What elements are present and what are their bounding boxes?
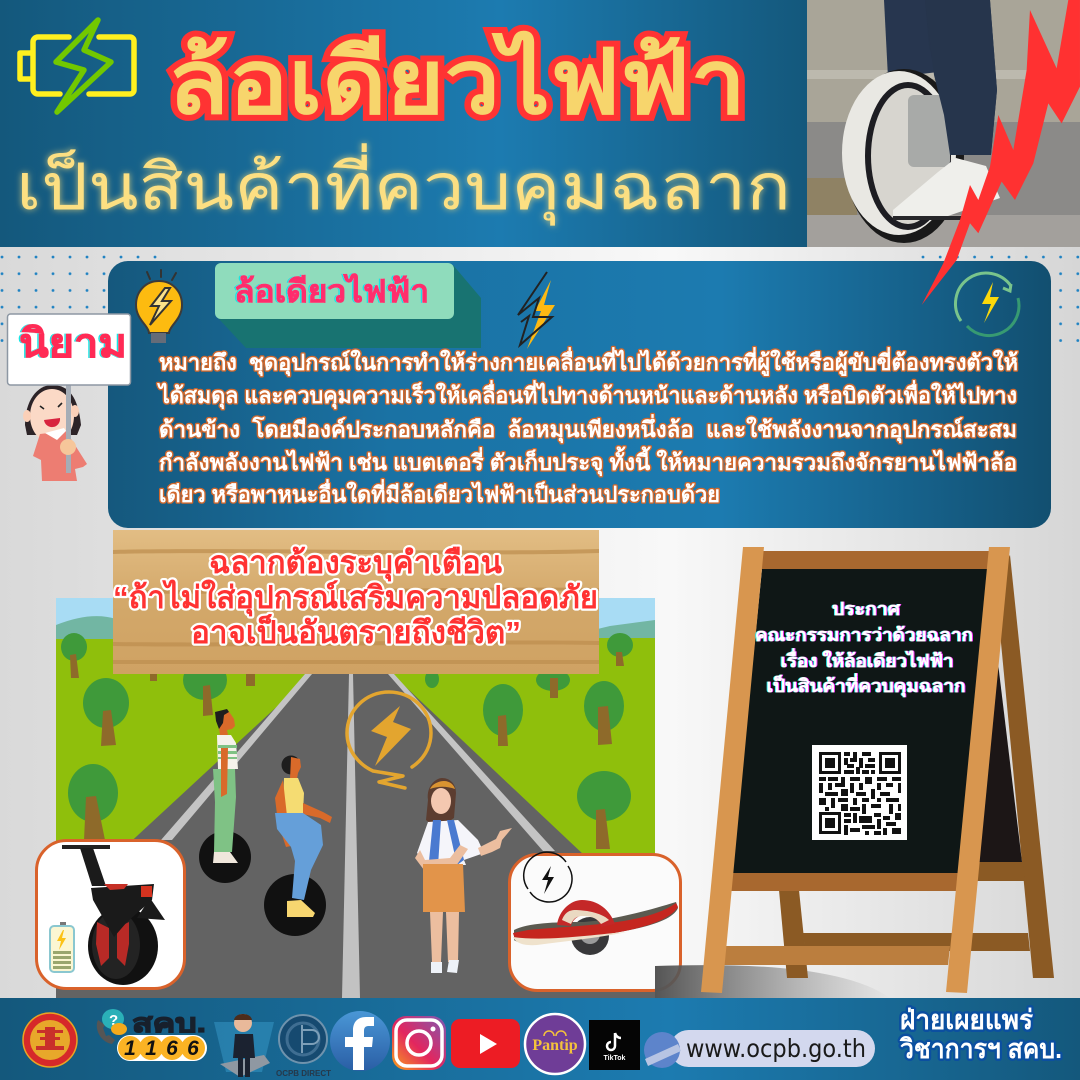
wood sign: warning: อาจเป็นอันตรายถึงชีวิต” xyxy=(191,613,521,650)
title: ล้อเดียวไฟฟ้า xyxy=(168,31,746,133)
logo: hotline 1166: 1 xyxy=(145,1037,157,1060)
definition text: กำลังพลังงานไฟฟ้า เช่น แบตเตอรี่ ตัวเก็บประจุ ทั้งนี้ ให้หมายความรวมถึงจักรยานไฟฟ้าล้อ xyxy=(159,446,1017,477)
logo: hotline 1166: ? xyxy=(109,1012,118,1029)
logo: TikTok xyxy=(589,1020,640,1070)
board text: คณะกรรมการว่าด้วยฉลาก xyxy=(755,625,973,645)
icon: globe xyxy=(644,1032,681,1068)
definition text: เดียว หรือพาหนะอื่นใดที่มีล้อเดียวไฟฟ้าเป็นส่วนประกอบด้วย xyxy=(159,478,720,507)
board text xyxy=(755,599,973,698)
definition text: ด้านข้าง โดยมีองค์ประกอบหลักคือ ล้อหมุนเพียงหนึ่งล้อ และใช้พลังงานจากอุปกรณ์สะสม xyxy=(159,413,1017,444)
logo: hotline 1166: สคบ. xyxy=(132,1008,206,1038)
website pill xyxy=(644,1030,875,1068)
icon: charging cycle xyxy=(956,273,1019,336)
sign: definition xyxy=(8,314,130,385)
label: heading xyxy=(215,263,454,319)
illustration: rider one xyxy=(199,709,251,883)
icon: light bulb xyxy=(136,270,182,343)
wood sign: warning: ฉลากต้องระบุคำเตือน xyxy=(209,545,502,582)
footer bar xyxy=(0,998,1080,1080)
department credit: ฝ่ายเผยแพร่ xyxy=(900,1005,1033,1035)
dot pattern: right xyxy=(914,249,1080,349)
wood sign: warning xyxy=(113,530,599,674)
floor shadow xyxy=(655,965,890,998)
road xyxy=(56,674,655,998)
label: heading: ล้อเดียวไฟฟ้า xyxy=(234,273,429,309)
icon: battery with lightning xyxy=(20,20,134,112)
illustration: road scene xyxy=(36,598,680,998)
logo: hotline 1166: 6 xyxy=(166,1037,178,1060)
logo: Facebook xyxy=(330,1011,390,1071)
icon: orange energy swirl xyxy=(347,692,431,788)
QR code xyxy=(812,745,907,840)
definition text: หมายถึง ชุดอุปกรณ์ในการทำให้ร่างกายเคลื่อนที่ไปได้ด้วยการที่ผู้ใช้หรือผู้ขับขี่ต้องทรงตัวให้ xyxy=(159,346,1018,377)
department credit xyxy=(899,1005,1062,1064)
sign: definition: นิยาม xyxy=(19,322,127,366)
definition text xyxy=(157,346,1018,507)
icon: lightning outline xyxy=(518,272,555,349)
illustration: mascot xyxy=(214,1014,274,1077)
card: monowheel xyxy=(36,840,184,988)
illustration: presenter woman xyxy=(415,778,512,973)
logo: Pantip: Pantip xyxy=(532,1037,578,1054)
board text: เรื่อง ให้ล้อเดียวไฟฟ้า xyxy=(780,648,954,671)
front frame xyxy=(760,551,1000,570)
panel: definition xyxy=(108,261,1051,528)
header banner xyxy=(0,0,807,247)
logo: hotline 1166 xyxy=(97,1008,207,1061)
logo: OCPB direct: OCPB DIRECT xyxy=(276,1069,331,1078)
icon: battery xyxy=(50,922,74,972)
logo: TikTok: TikTok xyxy=(604,1055,626,1062)
logo: hotline 1166: 1 xyxy=(124,1037,136,1060)
logo: YouTube xyxy=(451,1019,520,1068)
logo: OCPB direct xyxy=(276,1015,331,1078)
wood sign: warning: “ถ้าไม่ใส่อุปกรณ์เสริมความปลอดภัย xyxy=(113,579,598,617)
trees xyxy=(61,633,633,849)
board back xyxy=(995,555,1054,978)
icon: recharge cycle xyxy=(524,852,572,902)
definition text: ได้สมดุล และควบคุมความเร็วให้เคลื่อนที่ไปทางด้านหน้าและด้านหลัง หรือบิดตัวเพื่อให้ไปทาง xyxy=(157,379,1017,410)
subtitle: เป็นสินค้าที่ควบคุมฉลาก xyxy=(16,143,791,226)
photo: person riding electric unicycle xyxy=(807,0,1080,247)
card: hoverboard xyxy=(510,852,680,990)
board text: เป็นสินค้าที่ควบคุมฉลาก xyxy=(766,673,966,698)
label shadow xyxy=(218,265,481,348)
logo: hotline 1166: 6 xyxy=(187,1037,199,1060)
logo: Instagram xyxy=(392,1016,446,1070)
board: announcement xyxy=(701,547,1054,993)
department credit: วิชาการฯ สคบ. xyxy=(899,1034,1062,1064)
logo: seal xyxy=(23,1013,77,1067)
website pill: www.ocpb.go.th xyxy=(686,1034,866,1063)
illustration: woman holding sign xyxy=(23,385,87,481)
dot pattern: left xyxy=(0,249,165,349)
board text: ประกาศ xyxy=(832,599,901,619)
lightning bolt overlay xyxy=(922,0,1080,305)
logo: Pantip xyxy=(525,1014,585,1074)
illustration: rider two xyxy=(264,756,332,936)
